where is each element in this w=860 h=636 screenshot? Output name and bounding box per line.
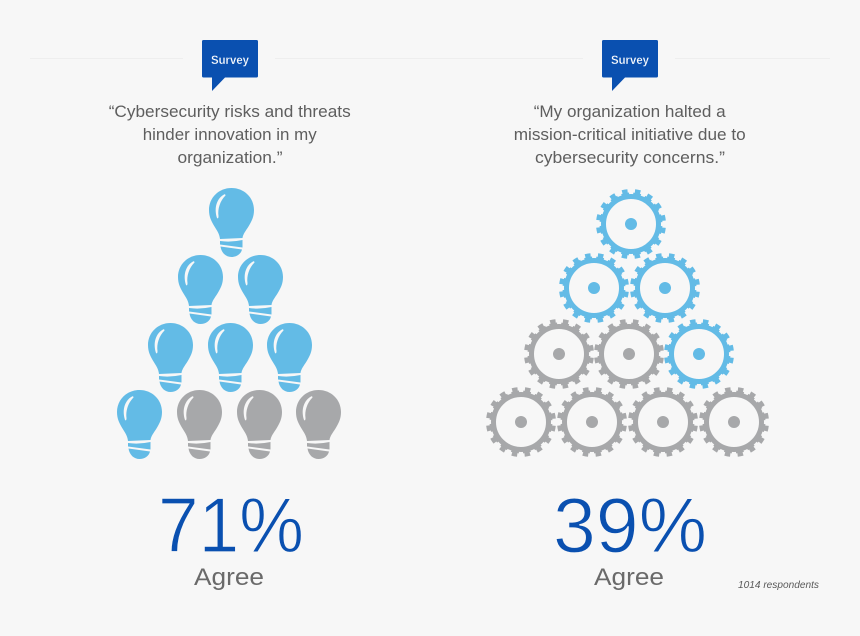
statistic 39%: 39% xyxy=(553,481,707,569)
quote text right: mission-critical initiative due to xyxy=(514,126,746,144)
quote text right: “My organization halted a xyxy=(534,103,727,121)
quote text left: “Cybersecurity risks and threats xyxy=(109,103,351,121)
panel: right survey xyxy=(488,40,767,591)
left divider line xyxy=(30,58,430,60)
icon: survey speech bubble right xyxy=(602,40,658,91)
right divider line xyxy=(430,58,830,60)
chart: light bulbs 71% xyxy=(117,188,341,459)
icon: survey speech bubble right: Survey xyxy=(611,53,649,67)
label Agree right: Agree xyxy=(594,564,664,591)
footnote respondents: 1014 respondents xyxy=(738,580,819,591)
panel: left survey xyxy=(109,40,355,591)
quote text left: hinder innovation in my xyxy=(143,126,317,144)
quote text left: organization.” xyxy=(178,149,282,167)
icon: survey speech bubble left: Survey xyxy=(211,53,249,67)
icon: survey speech bubble left xyxy=(202,40,258,91)
label Agree left: Agree xyxy=(194,564,264,591)
quote text right: cybersecurity concerns.” xyxy=(535,149,725,167)
chart: gears 39% xyxy=(488,191,767,455)
statistic 71%: 71% xyxy=(158,481,304,569)
